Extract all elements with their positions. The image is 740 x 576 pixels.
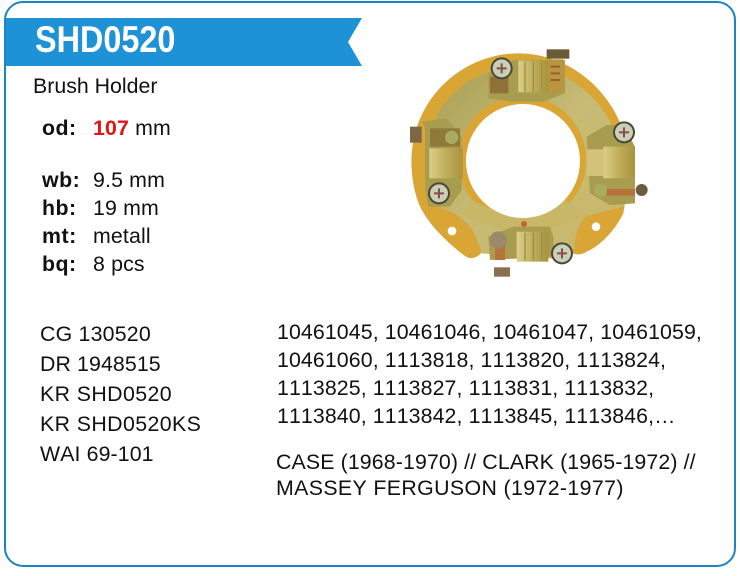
mounting holes [448, 227, 456, 235]
text block: OEM part numbers: 1113840, 1113842, 1113845, 1113846,… [277, 404, 676, 428]
spec: brush height: hb: [42, 196, 77, 220]
spec: material [42, 224, 151, 248]
text block: cross references: CG 130520 [40, 322, 151, 346]
spec: brush height: 19 mm [93, 196, 159, 220]
spec: brush width [42, 168, 165, 192]
text block: OEM part numbers: 10461045, 10461046, 10461047, 10461059, [277, 320, 702, 344]
inner yellow ring [458, 96, 586, 224]
spec: quantity [42, 252, 145, 276]
text block: applications [276, 450, 696, 500]
spec: brush width: wb: [42, 168, 80, 192]
text block: cross references: KR SHD0520 [40, 382, 172, 406]
brush box: right [587, 121, 648, 205]
spec: material: metall [93, 224, 151, 248]
text block: OEM part numbers: 1113825, 1113827, 1113831, 1113832, [277, 376, 654, 400]
subtitle: product type: Brush Holder [33, 74, 157, 98]
title: product code: SHD0520 [35, 19, 175, 60]
spec: outer diameter [42, 116, 171, 140]
brush box: top [488, 49, 569, 102]
lower inner metal rim [462, 198, 585, 237]
text block: OEM part numbers [277, 320, 702, 428]
brush box: left [410, 118, 463, 207]
text block: cross references: WAI 69-101 [40, 442, 154, 466]
yellow insulating disc [411, 53, 627, 258]
centre hole [466, 104, 580, 218]
icon: brush holder product photo [410, 49, 648, 277]
text block: applications: MASSEY FERGUSON (1972-1977) [276, 476, 624, 500]
banner: product code ribbon [6, 18, 362, 66]
text block: applications: CASE (1968-1970) // CLARK (1965-1972) // [276, 450, 696, 474]
metal ring plate [428, 67, 624, 260]
spec: brush width: 9.5 mm [93, 168, 165, 192]
spec: outer diameter: 107 mm [93, 116, 171, 140]
text block: cross references [40, 322, 201, 466]
text block: cross references: KR SHD0520KS [40, 412, 201, 436]
spec: brush height [42, 196, 159, 220]
spec: outer diameter: od: [42, 116, 77, 140]
spec: material: mt: [42, 224, 77, 248]
text block: cross references: DR 1948515 [40, 352, 161, 376]
text block: OEM part numbers: 10461060, 1113818, 1113820, 1113824, [277, 348, 666, 372]
spec: quantity: bq: [42, 252, 77, 276]
brush box: bottom [488, 221, 573, 277]
spec: quantity: 8 pcs [93, 252, 145, 276]
